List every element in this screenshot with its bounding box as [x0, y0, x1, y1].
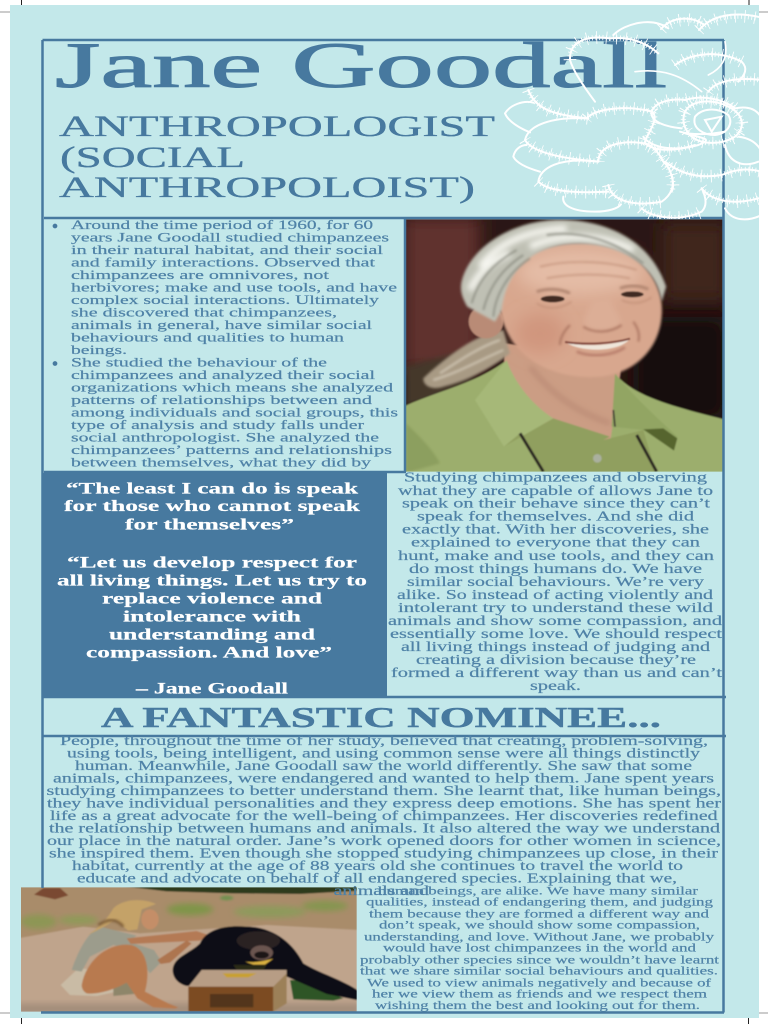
panel: bullet list: Around the time period of 1960, for 60: [71, 217, 373, 232]
text block: nominee explanation: animals and: [334, 883, 429, 898]
panel: quotes: all living things. Let us try to: [57, 572, 367, 590]
panel: bullet list: among individuals and social groups, this: [71, 404, 398, 420]
panel: bullet list: herbivores; make and use tools, and have: [71, 280, 397, 294]
panel: quotes: – Jane Goodall: [135, 680, 289, 698]
text block: closing paragraph: probably other species since we wouldn’t have learnt: [360, 952, 720, 966]
text block: closing paragraph: them because they are formed a different way and: [369, 906, 709, 920]
panel: bullet list: and family interactions. Observed that: [71, 254, 376, 270]
text block: nominee explanation: using tools, being intelligent, and using common sense were all things distinctly: [67, 746, 700, 760]
panel: bullet list: between themselves, what they did by: [71, 454, 372, 470]
panel: quotes: compassion. And love”: [86, 644, 332, 662]
bullet marker two: [53, 361, 57, 366]
panel: bullet list: social anthropologist. She analyzed the: [71, 430, 379, 444]
panel: quotes: intolerance with: [123, 608, 301, 626]
text block: nominee explanation: human. Meanwhile, Jane Goodall saw the world differently. She saw that some: [75, 758, 692, 773]
text block: nominee explanation: habitat, currently at the age of 88 years old she continues to travel the world to: [72, 858, 683, 873]
subtitle: ANTHROPOLOGIST: [59, 110, 495, 143]
panel: bullet list: patterns of relationships between and: [71, 392, 373, 407]
panel: quotes: replace violence and: [102, 590, 322, 608]
decorative flower outline: [505, 15, 762, 219]
panel: bullet list: complex social interactions. Ultimately: [71, 292, 380, 307]
text block: nominee explanation: [46, 733, 722, 898]
panel: bullet list: in their natural habitat, and their social: [71, 242, 384, 257]
text block: nominee explanation: life as a great advocate for the well-being of chimpanzees. Her discoveries redefined: [50, 808, 718, 823]
photo of Jane with a chimpanzee: [18, 885, 360, 1015]
text block: nominee explanation: animals, chimpanzees, were endangered and wanted to help them. Jane spent years: [53, 770, 714, 786]
text block: closing paragraph: understanding, and love. Without Jane, we probably: [364, 929, 714, 943]
text block: nominee explanation: the relationship between humans and animals. It also altered the way we understand: [49, 820, 720, 836]
text block: studying chimpanzees: hunt, make and use tools, and they can: [398, 548, 714, 563]
panel: bullet list: She studied the behaviour of the: [71, 354, 327, 370]
panel: bullet list: type of analysis and study falls under: [71, 417, 365, 432]
panel: bullet list: chimpanzees are omnivores, not: [71, 267, 330, 282]
panel: bullet list: years Jane Goodall studied chimpanzees: [71, 230, 389, 244]
subtitle: (SOCIAL: [60, 141, 245, 174]
text block: studying chimpanzees: formed a different way than us and can’t: [391, 665, 722, 680]
text block: studying chimpanzees: speak on their behave since they can’t: [402, 496, 710, 511]
text block: closing paragraph: [360, 883, 720, 1012]
text block: closing paragraph: her we view them as friends and we respect them: [372, 987, 708, 1001]
text block: studying chimpanzees: [388, 470, 722, 693]
panel: bullet list: [53, 217, 398, 470]
text block: studying chimpanzees: creating a division because they’re: [416, 652, 696, 667]
text block: nominee explanation: studying chimpanzees to better understand them. She learnt that, like human beings,: [46, 783, 721, 798]
text block: closing paragraph: would have lost chimpanzees in the world and: [383, 941, 696, 955]
text block: closing paragraph: We used to view animals negatively and because of: [367, 975, 711, 989]
fringe hatching fine: [525, 16, 762, 218]
fringe hatching long: [525, 16, 762, 218]
text block: closing paragraph: that we share similar social behaviours and qualities.: [360, 964, 718, 978]
text block: nominee explanation: they have individual personalities and they express deep emotions. She has spent her: [47, 796, 722, 810]
text block: studying chimpanzees: do most things humans do. We have: [409, 561, 702, 576]
text block: studying chimpanzees: all living things instead of judging and: [401, 639, 710, 654]
title: Jane Goodall: [55, 30, 667, 102]
bullet marker one: [53, 224, 57, 228]
text block: studying chimpanzees: animals and show some compassion, and: [388, 613, 722, 628]
panel: bullet list: animals in general, have similar social: [71, 317, 373, 332]
subtitle: ANTHROPOLOIST): [59, 171, 475, 204]
subtitle: [59, 110, 495, 204]
text block: studying chimpanzees: similar social behaviours. We’re very: [407, 574, 704, 589]
text block: studying chimpanzees: speak for themselves. And she did: [417, 509, 694, 524]
text block: studying chimpanzees: explained to everyone that they can: [411, 535, 700, 550]
text block: closing paragraph: don’t speak, we should show some compassion,: [379, 918, 700, 932]
panel: bullet list: chimpanzees and analyzed their social: [71, 367, 376, 382]
text block: closing paragraph: qualities, instead of endangering them, and judging: [366, 895, 713, 909]
text block: studying chimpanzees: essentially some love. We should respect: [390, 626, 722, 641]
panel: bullet list: organizations which means she analyzed: [71, 380, 394, 394]
portrait photo of Jane Goodall: [403, 217, 727, 475]
text block: nominee explanation: People, throughout the time of her study, believed that creating, problem-solving,: [60, 733, 708, 748]
panel: quotes: [42, 473, 387, 698]
panel: quotes: “Let us develop respect for: [67, 554, 357, 572]
text block: studying chimpanzees: Studying chimpanzees and observing: [404, 470, 707, 485]
text block: studying chimpanzees: exactly that. With her discoveries, she: [402, 522, 709, 537]
text block: closing paragraph: wishing them the best and looking out for them.: [375, 998, 700, 1012]
text block: nominee explanation: our place in the natural order. Jane’s work opened doors for other women in science,: [47, 833, 721, 848]
panel: quotes: for those who cannot speak: [64, 498, 360, 515]
text block: studying chimpanzees: speak.: [530, 678, 581, 693]
panel: quotes: for themselves”: [125, 516, 294, 534]
heading: a fantastic nominee: A FANTASTIC NOMINEE...: [101, 702, 661, 734]
text block: studying chimpanzees: what they are capable of allows Jane to: [398, 483, 713, 498]
panel: bullet list: behaviours and qualities to human: [71, 330, 345, 344]
text block: nominee explanation: she inspired them. Even though she stopped studying chimpanzees up close, in their: [49, 846, 719, 860]
text block: nominee explanation: educate and advocate on behalf of all endangered species. Explaining that we,: [77, 870, 677, 886]
text block: closing paragraph: human beings, are alike. We have many similar: [378, 883, 698, 897]
panel: bullet list: beings.: [71, 342, 127, 357]
text block: studying chimpanzees: alike. So instead of acting violently and: [397, 587, 713, 602]
panel: quotes: understanding and: [109, 626, 315, 644]
panel: bullet list: she discovered that chimpanzees,: [71, 304, 337, 320]
panel: quotes: “The least I can do is speak: [66, 480, 358, 498]
text block: studying chimpanzees: intolerant try to understand these wild: [398, 600, 713, 615]
panel: bullet list: chimpanzees’ patterns and relationships: [71, 442, 392, 457]
